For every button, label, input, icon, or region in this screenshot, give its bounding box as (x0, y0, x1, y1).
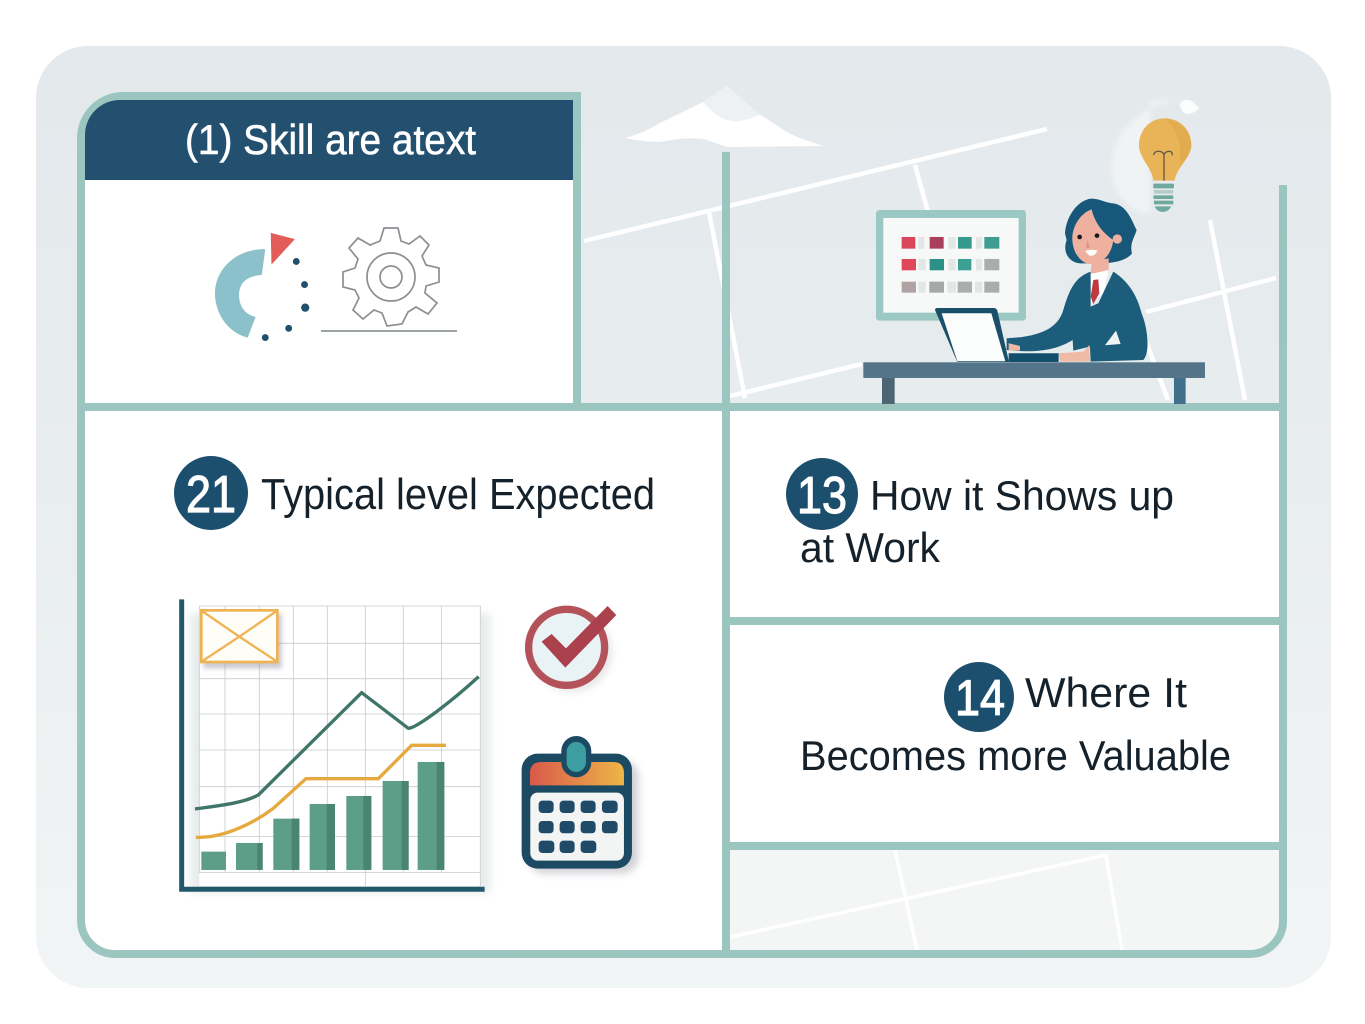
teal frame lines (81, 96, 1283, 954)
heading text (800, 669, 1231, 779)
heading text (800, 472, 1174, 571)
icon: envelope (201, 610, 282, 668)
number badge 21: 21 (186, 466, 236, 524)
icon: check mark (529, 606, 616, 692)
heading text: Typical level Expected (261, 470, 655, 519)
number badge 21 (174, 456, 248, 530)
heading: skill: (1) Skill are atext (185, 116, 476, 163)
icon: gear (343, 228, 439, 326)
number badge 14: 14 (955, 670, 1005, 726)
number badge 14 (944, 662, 1014, 732)
heading text: at Work (800, 524, 941, 571)
bars (201, 762, 444, 870)
icon: lightbulb (1112, 100, 1199, 213)
section 21: typical level (174, 456, 655, 530)
heading text: How it Shows up (870, 472, 1174, 519)
heading text: Becomes more Valuable (800, 732, 1231, 779)
line: orange (196, 745, 446, 837)
white panels (85, 180, 1280, 950)
chart: growth grid with bars and lines (182, 599, 490, 893)
woman (1007, 199, 1148, 362)
laptop (935, 308, 1009, 362)
gear baseline (321, 330, 457, 332)
monitor (876, 210, 1026, 321)
line: dark green (195, 677, 479, 809)
illustration: woman at desk (863, 199, 1205, 404)
section 14: where it becomes more valuable (800, 662, 1231, 779)
panel 1 heading bar (85, 100, 573, 180)
number badge 13: 13 (797, 467, 847, 525)
heading text: Where It (1025, 669, 1187, 716)
background decoration: mountain and white road lines (584, 86, 1276, 400)
section 13: how it shows up (786, 458, 1174, 571)
number badge 13 (786, 458, 858, 530)
icon: calendar (522, 736, 638, 873)
panel: bottom-right empty with road lines (730, 850, 1280, 950)
icon: progress ring with red marker (215, 233, 309, 341)
axes (182, 599, 485, 889)
desk (863, 362, 1205, 404)
